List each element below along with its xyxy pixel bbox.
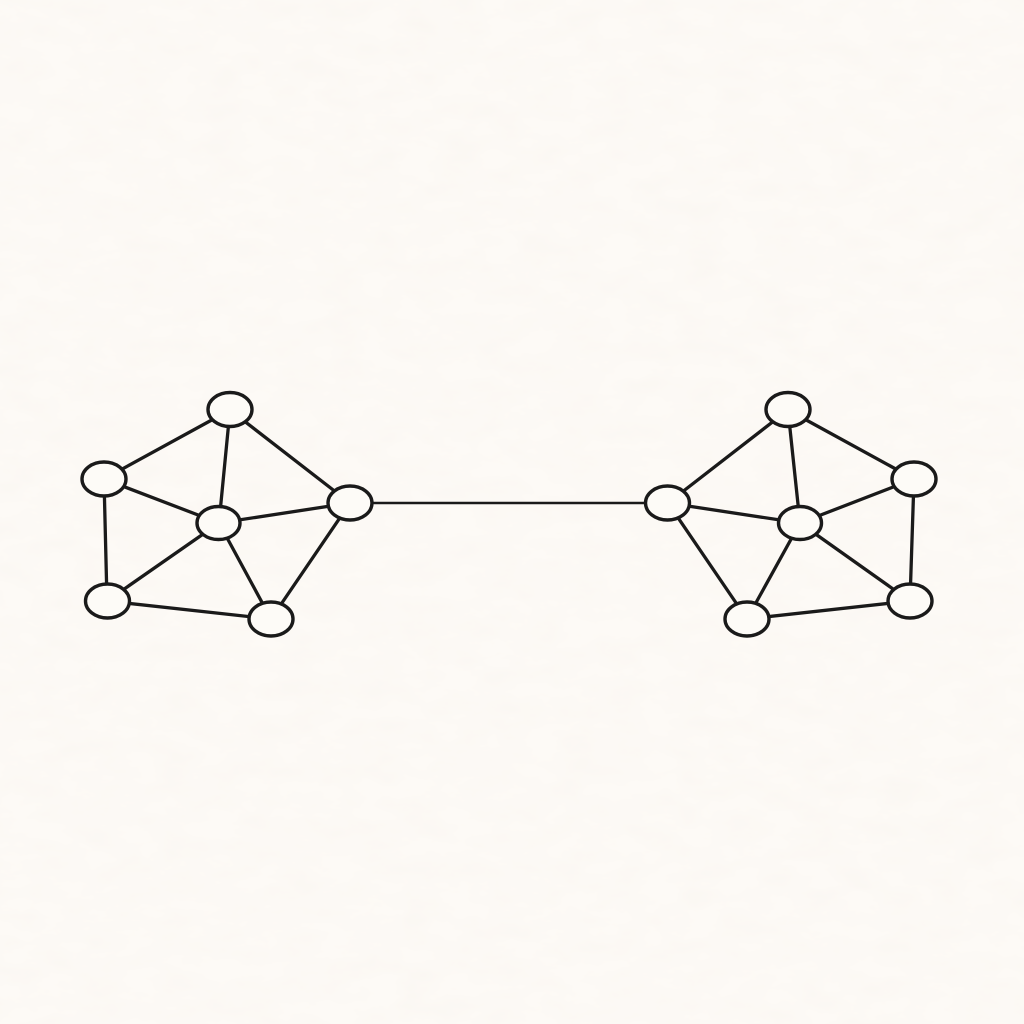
right cluster nodes — [646, 392, 936, 636]
left cluster nodes — [82, 392, 372, 636]
left cluster — [82, 392, 372, 636]
bridge line between clusters — [350, 502, 668, 504]
right cluster edges — [668, 410, 914, 619]
right cluster — [646, 392, 936, 636]
left cluster edges — [104, 410, 350, 619]
